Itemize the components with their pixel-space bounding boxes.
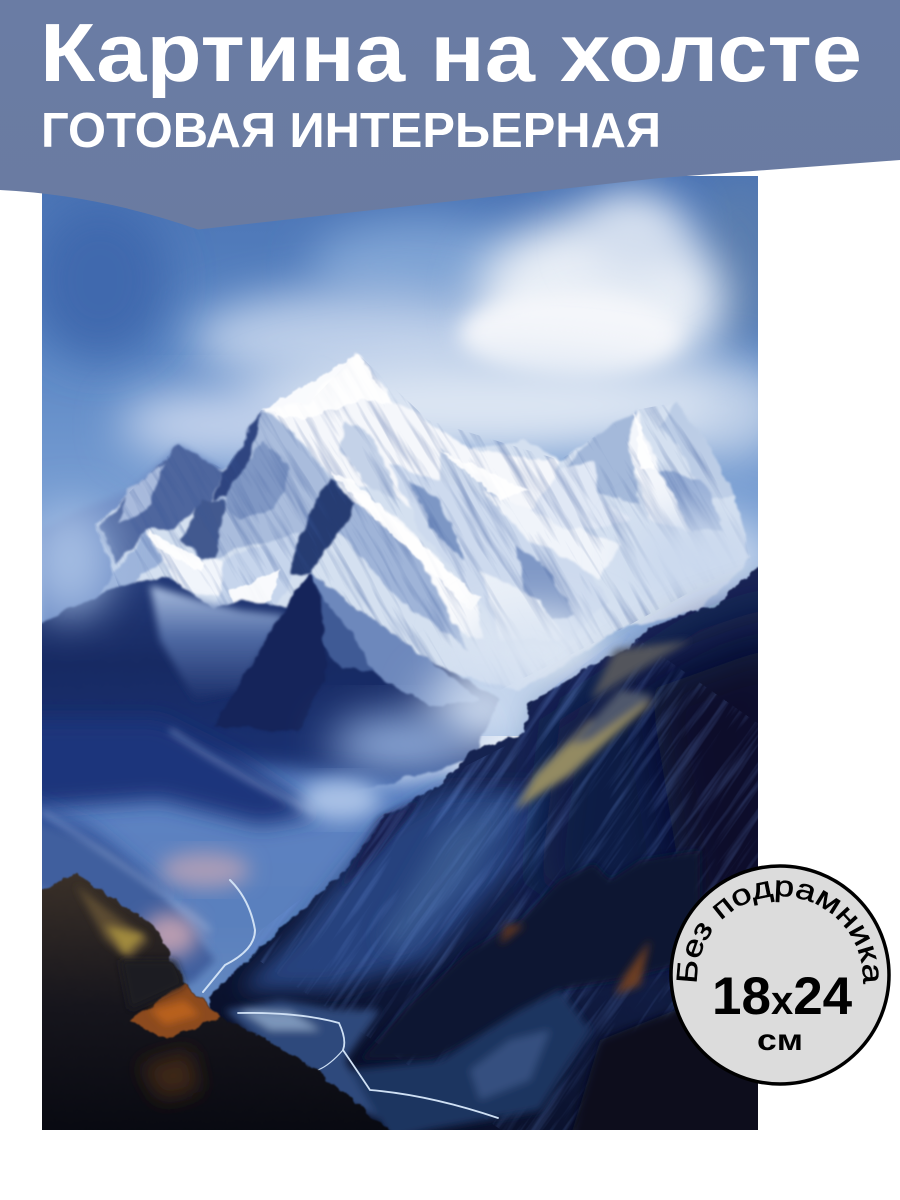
curved label: Без подрамника bbox=[676, 880, 879, 984]
sky bbox=[42, 176, 758, 736]
rivers bbox=[203, 880, 498, 1118]
right peaks bbox=[565, 410, 640, 505]
painting: snowy mountains bbox=[42, 176, 758, 1130]
lit snow on left mountain bbox=[150, 585, 285, 700]
second dark ridge bbox=[360, 850, 700, 1060]
size badge bbox=[669, 864, 891, 1086]
clouds bbox=[30, 170, 790, 460]
dark front peak bbox=[215, 572, 325, 730]
distant valley slopes bbox=[20, 720, 380, 985]
badge circle bbox=[671, 866, 889, 1084]
rocky river bed bbox=[224, 988, 758, 1130]
white upper snow bbox=[262, 352, 560, 510]
dark left mountains bbox=[20, 572, 500, 800]
size number: 18x24 bbox=[712, 967, 853, 1026]
subtitle: ГОТОВАЯ ИНТЕРЬЕРНАЯ bbox=[41, 104, 661, 158]
far blue haze mountains bbox=[42, 442, 224, 622]
header banner bbox=[0, 0, 900, 230]
snow highlights bbox=[147, 354, 655, 620]
right-side mist bbox=[630, 515, 770, 605]
unit: см bbox=[757, 1024, 803, 1057]
title: Картина на холсте bbox=[40, 6, 862, 99]
mist around foothills bbox=[30, 505, 610, 775]
ridge streak texture bbox=[250, 639, 758, 1130]
foreground rock bbox=[42, 872, 390, 1130]
snow streak texture bbox=[96, 358, 745, 677]
shaded faces bbox=[100, 445, 225, 565]
main snow massif bbox=[95, 353, 750, 690]
right dark ridge bbox=[208, 566, 758, 1130]
mid textured snow bbox=[389, 464, 522, 560]
sunlit patches bbox=[515, 640, 690, 810]
banner shape bbox=[0, 0, 900, 230]
lower-left valley fog bbox=[42, 754, 461, 1010]
orange ridge accents bbox=[500, 925, 650, 995]
diagonal white ridge bbox=[330, 473, 483, 640]
